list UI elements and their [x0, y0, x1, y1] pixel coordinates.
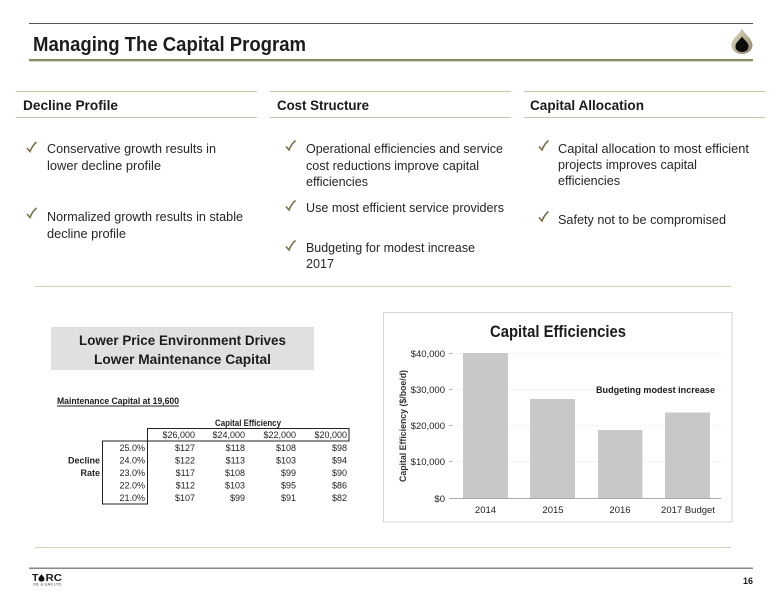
table: maintenance capital sensitivity: $127	[175, 443, 195, 453]
table: maintenance capital sensitivity: $103	[225, 480, 245, 490]
table: maintenance capital sensitivity: $24,000	[212, 430, 245, 440]
bullet: operational efficiencies: cost reductions improve capital	[306, 159, 479, 173]
bullet: operational efficiencies: efficiencies	[306, 175, 368, 189]
x axis labels	[475, 505, 715, 516]
table: maintenance capital sensitivity: $94	[332, 456, 347, 466]
bullet: operational efficiencies: Operational efficiencies and service	[306, 142, 503, 156]
table: maintenance capital sensitivity: 23.0%	[119, 468, 145, 478]
table: maintenance capital sensitivity: Rate	[80, 468, 100, 478]
x axis labels: 2015	[542, 505, 564, 516]
table: maintenance capital sensitivity: 24.0%	[119, 456, 145, 466]
callout: lower price environment: Lower Price Environment Drives	[79, 332, 286, 348]
bullet: budgeting: Budgeting for modest increase	[306, 241, 475, 255]
y axis labels	[411, 349, 445, 505]
bullet: normalized growth	[27, 208, 243, 241]
y axis labels: $30,000	[411, 385, 445, 396]
y axis labels: $20,000	[411, 421, 445, 432]
table: maintenance capital sensitivity: $98	[332, 443, 347, 453]
table: maintenance capital sensitivity: $90	[332, 468, 347, 478]
logo: Torc: T	[32, 572, 39, 584]
table: maintenance capital sensitivity: $112	[176, 480, 195, 490]
table: maintenance capital sensitivity: Decline	[68, 456, 100, 466]
title: Managing The Capital Program	[33, 34, 306, 56]
table title: Maintenance Capital at 19,600	[57, 396, 179, 406]
bullet: capital allocation: projects improves capital	[558, 158, 697, 172]
bullet: budgeting	[286, 240, 475, 271]
y axis labels: $10,000	[411, 457, 445, 468]
bullet: capital allocation: efficiencies	[558, 174, 620, 188]
x axis labels: 2017 Budget	[661, 505, 715, 516]
table: maintenance capital sensitivity: $20,000	[314, 430, 347, 440]
logo: Torc: OIL & GAS LTD	[33, 582, 61, 586]
panel: cost structure	[270, 91, 511, 271]
panel: decline profile	[16, 91, 257, 241]
callout: lower price environment: Lower Maintenance Capital	[94, 351, 271, 367]
heading: decline profile: Decline Profile	[23, 97, 118, 113]
table: maintenance capital sensitivity: 22.0%	[119, 480, 145, 490]
table: maintenance capital sensitivity: 25.0%	[119, 443, 145, 453]
table: maintenance capital sensitivity: $118	[226, 443, 245, 453]
bullet: service providers: Use most efficient service providers	[306, 201, 504, 215]
table: maintenance capital sensitivity: $108	[276, 443, 296, 453]
bars	[463, 353, 710, 498]
bullet: normalized growth: decline profile	[47, 227, 126, 241]
chart title: Capital Efficiencies	[490, 323, 626, 341]
heading: capital allocation: Capital Allocation	[530, 97, 644, 113]
table: maintenance capital sensitivity: $103	[276, 456, 296, 466]
bullet: operational efficiencies	[286, 140, 503, 189]
y axis title: Capital Efficiency ($/boe/d)	[398, 370, 408, 482]
bullet: conservative growth: Conservative growth results in	[47, 142, 216, 156]
bullet: safety: Safety not to be compromised	[558, 213, 726, 227]
table: maintenance capital sensitivity: $91	[281, 493, 296, 503]
bar chart: capital efficiencies	[384, 312, 732, 522]
annotation: budgeting modest increase: Budgeting modest increase	[596, 385, 715, 395]
table column heading: Capital Efficiency	[215, 418, 281, 428]
bullet: capital allocation	[539, 140, 750, 188]
bullet: conservative growth	[27, 142, 216, 173]
table: maintenance capital sensitivity: $122	[175, 456, 195, 466]
icon: oil drop logo	[732, 28, 752, 54]
callout: lower price environment	[51, 327, 314, 370]
table: maintenance capital sensitivity: $86	[332, 480, 347, 490]
table: maintenance capital sensitivity: $108	[225, 468, 245, 478]
bullet: budgeting: 2017	[306, 257, 334, 271]
table: maintenance capital sensitivity: 21.0%	[119, 493, 145, 503]
table: maintenance capital sensitivity: $99	[230, 493, 245, 503]
table: maintenance capital sensitivity: $113	[226, 456, 245, 466]
table: maintenance capital sensitivity: $82	[332, 493, 347, 503]
y axis labels: $40,000	[411, 349, 445, 360]
logo: Torc: RC	[46, 572, 62, 584]
table: maintenance capital sensitivity	[57, 396, 349, 504]
page number: 16	[743, 576, 753, 587]
table: maintenance capital sensitivity: $99	[281, 468, 296, 478]
bullet: capital allocation: Capital allocation to most efficient	[558, 142, 750, 156]
table: maintenance capital sensitivity: $26,000	[162, 430, 195, 440]
panel: capital allocation	[524, 91, 765, 227]
axes	[449, 354, 721, 498]
y axis labels: $0	[434, 494, 445, 505]
footer	[29, 568, 753, 587]
table: maintenance capital sensitivity: $95	[281, 480, 296, 490]
heading: cost structure: Cost Structure	[277, 97, 369, 113]
x axis labels: 2016	[609, 505, 631, 516]
bullet: normalized growth: Normalized growth results in stable	[47, 210, 243, 224]
x axis labels: 2014	[475, 505, 496, 516]
table: maintenance capital sensitivity: $117	[176, 468, 195, 478]
logo: Torc	[32, 572, 62, 586]
bullet: conservative growth: lower decline profile	[47, 159, 161, 173]
table: maintenance capital sensitivity: $22,000	[263, 430, 296, 440]
table: maintenance capital sensitivity: $107	[175, 493, 195, 503]
